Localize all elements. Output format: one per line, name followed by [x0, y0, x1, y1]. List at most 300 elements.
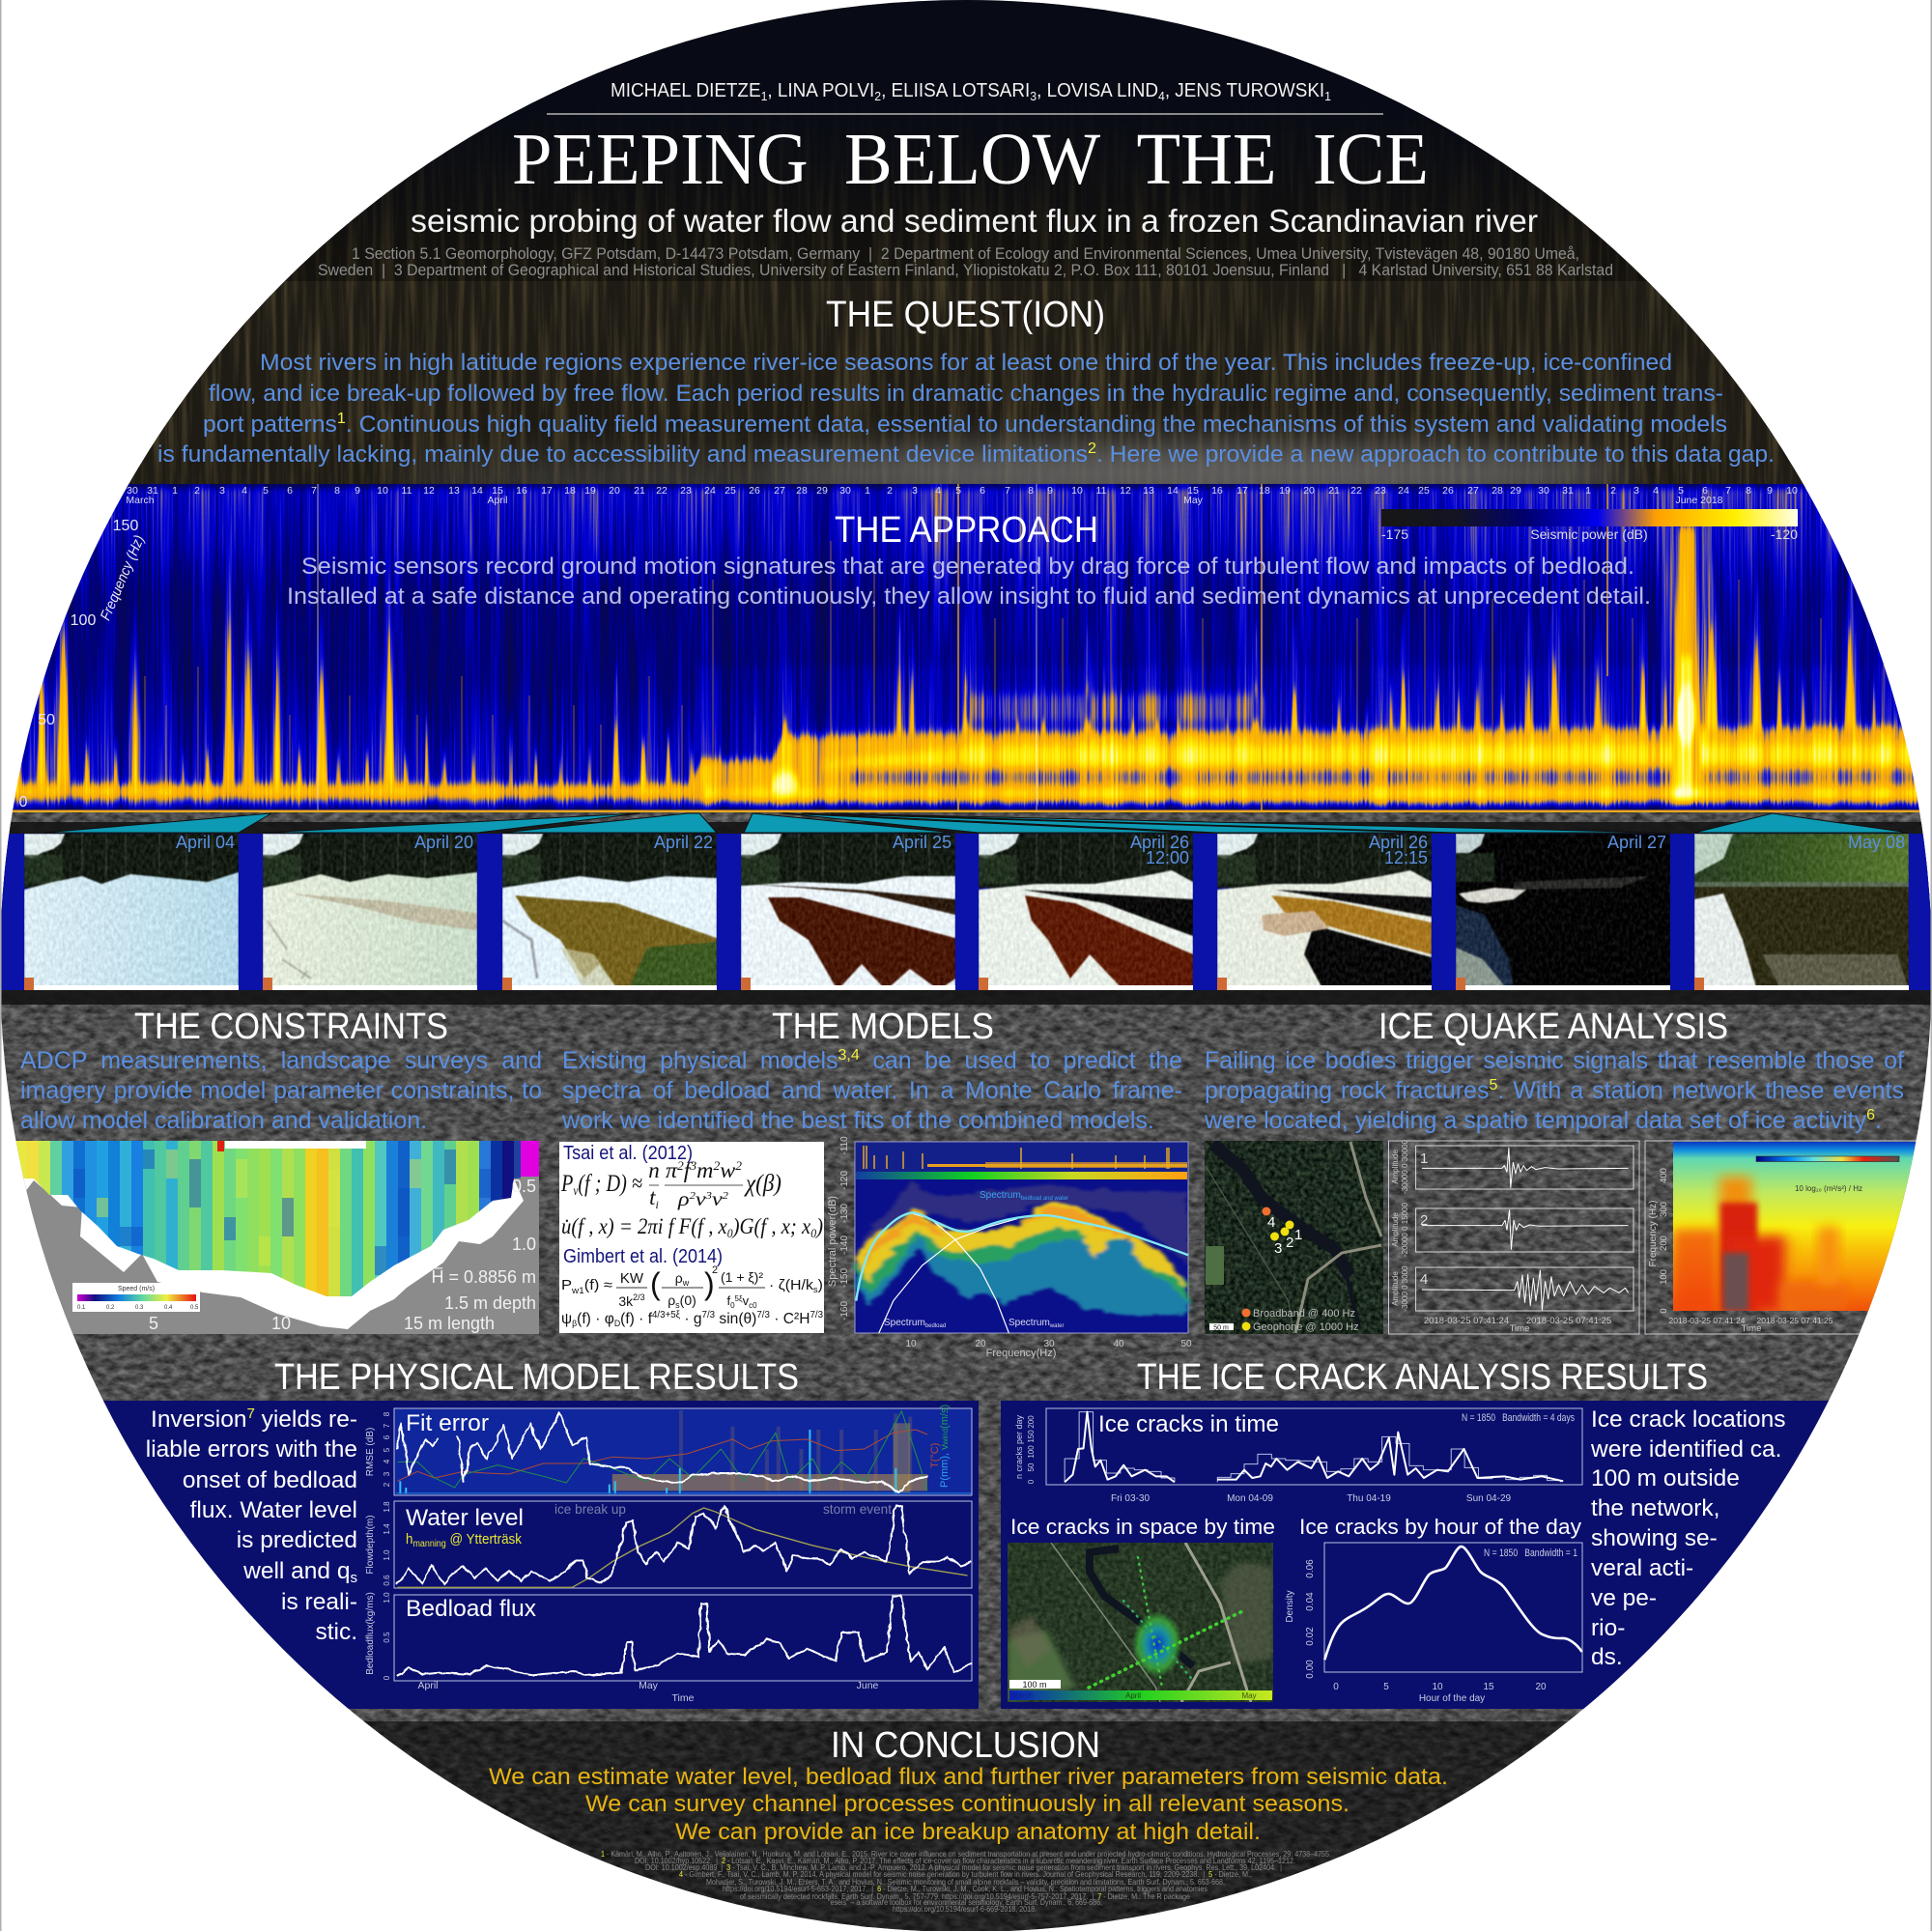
- authors: 1: [1324, 89, 1331, 103]
- text: conclusions: We can estimate water level, bedload flux and further river parameters from seismic data.: [489, 1764, 1448, 1790]
- timeline: day ticks: 30: [839, 485, 851, 497]
- panel: model equations: 2: [723, 1190, 729, 1202]
- text: conclusions: We can provide an ice breakup anatomy at high detail.: [675, 1819, 1261, 1845]
- chart: spectra Monte Carlo fits: 30: [1043, 1339, 1055, 1349]
- timeline: day ticks: 31: [147, 485, 158, 497]
- chart: water level: ice break up: [554, 1501, 626, 1517]
- chart: spectra Monte Carlo fits: -160: [839, 1301, 850, 1320]
- panel: model equations: c0: [749, 1301, 757, 1310]
- panel: model equations: β: [572, 1319, 577, 1328]
- timeline: day ticks: 16: [516, 485, 527, 497]
- panel: model equations: w: [720, 1158, 736, 1182]
- text: references: https://doi.org/10.5194/esurf-6-669-2018, 2018.: [893, 1904, 1037, 1914]
- chart: cracks by hour: 15: [1483, 1682, 1494, 1692]
- text: ice quake analysis: [1205, 1047, 1904, 1134]
- panel: model equations: 0: [810, 1226, 817, 1240]
- map: ice cracks in space: March: [1011, 1691, 1033, 1700]
- chart: spectra Monte Carlo fits: 20: [975, 1339, 986, 1349]
- panel: model equations: 0: [730, 1301, 735, 1310]
- timeline: day ticks: 16: [1211, 485, 1223, 497]
- timeline: day ticks: 4: [1653, 485, 1659, 497]
- text: ice crack locations: veral acti-: [1591, 1555, 1693, 1581]
- chart: spectra Monte Carlo fits: -150: [839, 1268, 850, 1288]
- photo date labels: April 25: [893, 833, 952, 852]
- panel: model equations: 0: [727, 1226, 733, 1240]
- chart: ice quake spectrogram: 200: [1659, 1235, 1669, 1251]
- chart: ice quake waveforms: Amplitude: [1391, 1212, 1400, 1247]
- photo date labels: April 26: [1130, 833, 1189, 852]
- chart: ADCP river cross section: 0.5: [512, 1177, 536, 1196]
- timeline: day ticks: 6: [287, 485, 293, 497]
- text: the question: flow, and ice break-up followed by free flow. Each period results in dramatic changes in the hydraulic regime and, consequently, sediment trans-: [209, 381, 1723, 407]
- panel: model equations: Gimbert et al. (2014): [563, 1246, 723, 1267]
- chart: ice quake waveforms: 1: [1420, 1150, 1428, 1167]
- panel: ice crack results: [1001, 1401, 1932, 1709]
- chart: spectra Monte Carlo fits: Spectral power(dB): [827, 1196, 838, 1287]
- timeline: day ticks: 22: [1350, 485, 1362, 497]
- dark band behind photo strip: [0, 822, 1932, 1005]
- map markers and legend: Geophone @ 1000 Hz: [1253, 1321, 1359, 1333]
- axis labels: physical model plots: Bedloadflux(kg/ms): [365, 1592, 376, 1675]
- timeline: day ticks: 29: [816, 485, 828, 497]
- axis labels: physical model plots: 8: [383, 1411, 391, 1416]
- timeline: day ticks: June 2018: [1675, 495, 1723, 506]
- panel: model equations: 3: [704, 1190, 713, 1202]
- panel: model equations: KW: [620, 1270, 644, 1287]
- panel: model equations: f: [726, 1293, 730, 1308]
- map markers and legend: 1: [1294, 1227, 1302, 1243]
- frequency axis labels: 100: [71, 612, 96, 629]
- chart: spectra Monte Carlo fits: -110: [839, 1136, 850, 1155]
- axis labels: physical model plots: 1.8: [383, 1501, 391, 1513]
- chart: ADCP river cross section: [15, 1141, 539, 1334]
- chart: water level: storm event: [823, 1501, 892, 1517]
- panel: model equations: · C²H: [770, 1311, 810, 1327]
- text: ice crack locations: were identified ca.: [1590, 1436, 1781, 1462]
- timeline: day ticks: 19: [584, 485, 596, 497]
- text: ice crack locations: [1590, 1406, 1786, 1670]
- timeline: day ticks: 19: [1279, 485, 1291, 497]
- chart: ice quake waveforms: [1389, 1139, 1639, 1334]
- text: references: Mohadjer, S., Turowski, J. M., Ehlers, T. A., and Hovius, N.: Seismic monitoring of small alpine rockfalls – validity, precision and limitations, Earth Surf. Dynam., 5, 653-668,: [706, 1877, 1225, 1887]
- map markers and legend: [1209, 1207, 1359, 1333]
- text: inversion: onset of bedload: [183, 1467, 357, 1493]
- panel: model equations: ρ: [678, 1187, 688, 1210]
- timeline: day ticks: 23: [680, 485, 692, 497]
- chart: bedload flux: Bedload flux: [406, 1596, 536, 1622]
- panel: model equations: 7/3: [756, 1310, 770, 1320]
- text: references: [601, 1849, 1331, 1914]
- text: the question: [157, 350, 1775, 468]
- chart: ice cracks in time: 200: [1027, 1415, 1036, 1429]
- text: inversion: s: [350, 1570, 357, 1586]
- text: ice crack locations: ds.: [1591, 1644, 1623, 1670]
- timeline: day ticks: 28: [1492, 485, 1503, 497]
- chart: bedload flux: [394, 1595, 972, 1681]
- timeline: day ticks: 15: [492, 485, 503, 497]
- timeline: day ticks: 21: [634, 485, 645, 497]
- chart: spectra Monte Carlo fits: bedload and water: [1021, 1196, 1068, 1202]
- timeline: day ticks: 5: [955, 485, 961, 497]
- axis labels: physical model plots: 2: [383, 1482, 391, 1487]
- chart: ice quake spectrogram: Time: [1742, 1323, 1761, 1334]
- chart: ADCP river cross section: 10: [271, 1314, 291, 1333]
- axis labels: physical model plots: 0.6: [383, 1575, 391, 1586]
- panel: model equations: ): [818, 1277, 823, 1293]
- chart: cracks by hour: Density: [1285, 1590, 1295, 1623]
- photo date labels: April 27: [1607, 833, 1666, 852]
- map markers and legend: 4: [1267, 1214, 1275, 1231]
- chart: ice quake spectrogram: 2018-03-25 07:41:24: [1669, 1316, 1746, 1325]
- panel: model equations: 3k: [618, 1293, 633, 1309]
- chart: ice cracks in time: 100: [1027, 1445, 1036, 1459]
- map: ice cracks in space: 100 m: [1022, 1680, 1047, 1690]
- text: the question: is fundamentally lacking, mainly due to accessibility and measurement device limitations: [157, 441, 1080, 468]
- axis labels: physical model plots: 0: [383, 1675, 391, 1680]
- authors: 4: [1158, 89, 1165, 103]
- background: dark rock texture bottom: [363, 1721, 1569, 1931]
- axis labels: physical model plots: 7: [383, 1423, 391, 1428]
- text: inversion: flux. Water level: [190, 1497, 357, 1523]
- panel: model equations: v: [573, 1184, 579, 1199]
- panel: model equations: n: [648, 1158, 660, 1182]
- chart: ice cracks in time: 0: [1027, 1479, 1036, 1484]
- frequency axis labels: [19, 518, 148, 810]
- timeline: day ticks: 17: [541, 485, 553, 497]
- chart: ice quake spectrogram: 10 log₁₀ (m²/s²) / Hz: [1795, 1184, 1862, 1193]
- text: inversion: is predicted: [237, 1527, 357, 1553]
- timeline: day ticks: 23: [1375, 485, 1386, 497]
- timeline: day ticks: 9: [355, 485, 360, 497]
- chart: water level: manning: [412, 1539, 446, 1549]
- authors: , JENS TUROWSKI: [1165, 80, 1324, 101]
- panel: model equations: t: [649, 1185, 656, 1209]
- text: inversion: 7: [246, 1406, 255, 1422]
- panel: model equations: (f) ≈: [584, 1277, 612, 1293]
- panel: model equations: v: [696, 1187, 706, 1210]
- background: dusk forest and grass photograph: [127, 0, 1805, 488]
- chart: spectra Monte Carlo fits: water: [1049, 1323, 1064, 1329]
- chart: spectra Monte Carlo fits: Frequency(Hz): [986, 1348, 1056, 1359]
- timeline: day ticks: 25: [1418, 485, 1430, 497]
- legend: speed: 0.5: [190, 1305, 199, 1311]
- panel: model equations: 3: [689, 1158, 697, 1173]
- text: the question: 2: [1088, 440, 1096, 457]
- timeline: day ticks: 18: [1259, 485, 1270, 497]
- axis labels: physical model plots: April: [417, 1680, 439, 1691]
- text: the models: spectra of bedload and water. In a Monte Carlo frame-: [562, 1077, 1182, 1104]
- panel: model equations: (f) · φ: [577, 1311, 614, 1327]
- chart: fit error: P(mm), vwind(m/s): [939, 1405, 951, 1488]
- text: the models: work we identified the best fits of the combined models.: [562, 1107, 1154, 1134]
- text: ice crack locations: Ice crack locations: [1591, 1406, 1786, 1433]
- chart: ADCP river cross section: 1.5 m depth: [444, 1293, 536, 1313]
- timeline: day ticks: 13: [1143, 485, 1154, 497]
- text: references: https://doi.org/10.5194/esurf-5-653-2017, 2017. | 6 - Dietze, M., Turowski, J. M., Cook, K. L., and Hovius, N.: Spatiotemporal patterns, triggers and anatomies: [723, 1884, 1208, 1893]
- chart: ice quake spectrogram: 400: [1659, 1168, 1669, 1183]
- mini spectrogram: [856, 1143, 1187, 1172]
- panel: model equations: D: [614, 1319, 621, 1328]
- heading: ice crack results: THE ICE CRACK ANALYSIS RESULTS: [1137, 1357, 1708, 1398]
- chart: cracks by hour: 20: [1535, 1682, 1547, 1692]
- timeline: day ticks: 9: [1767, 485, 1773, 497]
- map markers and legend: Broadband @ 400 Hz: [1253, 1308, 1355, 1320]
- teal connectors from spectrogram to photos: [43, 813, 1909, 833]
- chart: cracks by hour: 0.00: [1305, 1660, 1316, 1679]
- text: the approach: Seismic sensors record ground motion signatures that are generated by drag force of turbulent flow and impacts of bedload.: [301, 554, 1634, 580]
- panel: model equations: m: [696, 1158, 713, 1182]
- panel: model equations: ): [704, 1266, 715, 1301]
- chart: ADCP river cross section: 5: [149, 1314, 158, 1333]
- colour bar: seismic power: Seismic power (dB): [1530, 526, 1648, 542]
- chart: spectra Monte Carlo fits: Spectrum: [980, 1190, 1021, 1201]
- photo strip blue backing: [0, 834, 1932, 990]
- panel: model equations: w: [682, 1278, 690, 1288]
- timeline: day ticks: 28: [796, 485, 808, 497]
- timeline: day ticks: 22: [656, 485, 668, 497]
- chart: spectra Monte Carlo fits: [827, 1136, 1192, 1359]
- timeline: day ticks: 20: [609, 485, 620, 497]
- text: the approach: [287, 554, 1651, 610]
- affiliations: [318, 245, 1613, 279]
- timeline: day ticks: 24: [704, 485, 716, 497]
- panel: physical model results: [0, 1401, 979, 1709]
- timeline: day ticks: 10: [1071, 485, 1083, 497]
- chart: spectra Monte Carlo fits: 50: [1180, 1339, 1192, 1349]
- photo: April 26 12:00: [979, 834, 1193, 990]
- axis labels: physical model plots: 4: [383, 1459, 391, 1463]
- text: the question: port patterns: [203, 412, 336, 438]
- map: ice cracks in space: [1008, 1543, 1273, 1702]
- authors: MICHAEL DIETZE: [611, 80, 770, 101]
- text: the models: [562, 1047, 1182, 1134]
- axis labels: physical model plots: 1.0: [383, 1592, 391, 1604]
- photo date labels: May 08: [1848, 833, 1905, 852]
- chart: ADCP river cross section: H̅ = 0.8856 m: [431, 1267, 536, 1287]
- chart: ice quake waveforms: 2: [1420, 1212, 1428, 1229]
- authors: 3: [1030, 89, 1037, 103]
- timeline: day ticks: 15: [1187, 485, 1199, 497]
- text: ice crack locations: rio-: [1591, 1615, 1625, 1641]
- panel: model equations: 2/3: [633, 1292, 645, 1302]
- panel: model equations: Tsai et al. (2012): [563, 1143, 693, 1164]
- affiliations: Sweden | 3 Department of Geographical and Historical Studies, University of Eastern Finland, Yliopistokatu 2, P.O. Box 111, 80101 Joensuu, Finland | 4 Karlstad University, 651 88 Karlstad: [318, 262, 1613, 279]
- timeline: day ticks: 12: [423, 485, 435, 497]
- text: the constraints: allow model calibration and validation.: [20, 1107, 427, 1134]
- panel: model equations: 2: [690, 1190, 696, 1202]
- timeline: day ticks: 8: [1746, 485, 1751, 497]
- text: the question: Most rivers in high latitude regions experience river-ice seasons for at least one third of the year. This includes freeze-up, ice-confined: [260, 350, 1672, 376]
- chart: water level: @ Ytterträsk: [446, 1531, 522, 1548]
- heading: physical model results: THE PHYSICAL MODEL RESULTS: [274, 1357, 799, 1398]
- timeline: day ticks: March: [126, 495, 155, 506]
- legend: speed: 0.4: [164, 1305, 173, 1311]
- panel: model equations: 2: [712, 1264, 718, 1276]
- title: PEEPING BELOW THE ICE: [512, 119, 1429, 200]
- panel: model equations: P: [561, 1171, 576, 1197]
- timeline: day ticks: 4: [935, 485, 941, 497]
- text: the approach: Installed at a safe distance and operating continuously, they allow insight to fluid and sediment dynamics at unprecedent detail.: [287, 583, 1651, 610]
- chart: ice cracks in time: Ice cracks in time: [1098, 1411, 1279, 1437]
- photo date labels: April 20: [414, 833, 473, 852]
- chart: cracks by hour: 10: [1432, 1682, 1443, 1692]
- text: ice quake analysis: Failing ice bodies trigger seismic signals that resemble those of: [1205, 1047, 1904, 1074]
- text: ice crack locations: showing se-: [1591, 1525, 1718, 1551]
- map: ice cracks in space: April: [1125, 1691, 1141, 1700]
- map markers and legend: 3: [1274, 1240, 1282, 1257]
- frequency axis labels: 150: [113, 518, 138, 534]
- chart: ice quake spectrogram: 300: [1659, 1202, 1669, 1217]
- panel: model equations: [559, 1142, 824, 1333]
- panel: model equations: χ(β): [744, 1171, 781, 1197]
- heading: the constraints: THE CONSTRAINTS: [134, 1007, 448, 1047]
- chart: ice cracks in time: [1014, 1408, 1582, 1504]
- text: conclusions: We can survey channel processes continuously in all relevant seasons.: [585, 1791, 1350, 1817]
- chart: ice quake waveforms: -20000 0 15000: [1401, 1202, 1409, 1257]
- legend: speed: Speed (m/s): [118, 1286, 155, 1292]
- chart: ice cracks in time: n cracks per day: [1014, 1414, 1024, 1479]
- timeline: day ticks: May: [1183, 495, 1204, 506]
- heading: the models: THE MODELS: [772, 1007, 994, 1047]
- timeline: day ticks: 4: [242, 485, 247, 497]
- frequency axis labels: Frequency (Hz): [98, 533, 148, 623]
- photo date labels: 12:15: [1384, 848, 1428, 867]
- chart: ice quake waveforms: -30000 0 30000: [1401, 1139, 1409, 1194]
- panel: model equations: 7/3: [810, 1310, 823, 1320]
- chart: ice quake waveforms: 4: [1420, 1271, 1428, 1288]
- panel: model equations: )G(f , x; x: [731, 1214, 811, 1238]
- axis labels: physical model plots: [365, 1411, 879, 1704]
- legend: speed: 0.3: [135, 1305, 144, 1311]
- timeline: day ticks: 27: [1467, 485, 1479, 497]
- text: inversion: well and q: [243, 1558, 350, 1584]
- chart: ice quake waveforms: 2018-03-25 07:41:24: [1424, 1316, 1509, 1326]
- timeline: day ticks: 5: [1678, 485, 1684, 497]
- text: ice crack locations: 100 m outside: [1591, 1465, 1740, 1491]
- chart: fit error: Fit error: [406, 1410, 489, 1436]
- heading: in conclusion: IN CONCLUSION: [831, 1725, 1100, 1766]
- photo: April 04: [24, 834, 239, 990]
- timeline: day ticks: 24: [1398, 485, 1409, 497]
- timeline: day ticks: 30: [1538, 485, 1549, 497]
- map markers and legend: 2: [1286, 1235, 1293, 1251]
- chart: ice quake waveforms: 2018-03-25 07:41:25: [1526, 1316, 1611, 1326]
- chart: ADCP river cross section: 1.0: [512, 1235, 536, 1254]
- chart: cracks by hour: 5: [1383, 1682, 1389, 1692]
- chart: ice cracks in time: Thu 04-19: [1347, 1493, 1391, 1504]
- chart: water level: h: [406, 1531, 413, 1548]
- chart: cracks by hour: N = 1850 Bandwidth = 1: [1484, 1548, 1577, 1559]
- timeline: day ticks: 29: [1510, 485, 1521, 497]
- text: the question: 1: [337, 411, 346, 427]
- text: inversion: Inversion: [151, 1406, 246, 1433]
- text: ice crack locations: the network,: [1591, 1495, 1719, 1521]
- timeline: day ticks: 11: [1096, 485, 1107, 497]
- map: station network: [1205, 1141, 1383, 1334]
- photo date labels: April 22: [654, 833, 713, 852]
- heading: ice quake analysis: ICE QUAKE ANALYSIS: [1378, 1007, 1728, 1047]
- axis labels: physical model plots: 1.4: [383, 1523, 391, 1535]
- chart: ice cracks in time: 50: [1027, 1462, 1036, 1471]
- text: references: 1 - Kämäri, M., Alho, P., Aaltonen, J., Veijalainen, N., Huokuna, M. and Lotsari, E., 2015. River ice cover influence on sediment transportation at present and under projected hydro-climatic conditions. Hydrological Processes, 29: 4738–4755.: [601, 1849, 1331, 1859]
- panel: model equations: ): [814, 1214, 823, 1238]
- timeline: day ticks: 2: [1610, 485, 1616, 497]
- panel: model equations: ρ: [668, 1292, 675, 1308]
- photo date labels: [176, 835, 1905, 864]
- authors: 1: [761, 89, 767, 103]
- colour bar: seismic power: -175: [1381, 526, 1408, 542]
- chart: cracks by hour: 0.04: [1305, 1592, 1316, 1611]
- legend: speed: [72, 1283, 200, 1312]
- chart: cracks by hour: [1285, 1543, 1582, 1704]
- text: references: of seismically detected rockfalls, Earth Surf. Dynam., 5, 757-779, https://doi.org/10.5194/esurf-5-757-2017, 2017. | 7 - Dietze, M.: The R package: [740, 1891, 1190, 1901]
- chart: fit error: T(°C): [929, 1443, 941, 1468]
- chart: ice cracks in time: Mon 04-09: [1227, 1493, 1273, 1504]
- text: references: 4 - Gimbert, F., Tsai, V. C., Lamb, M. P. 2014. A physical model for seismic noise generation by turbulent flow in rivers. Journal of Geophysical Research, 119, 2209-2238. | 5 - Dietze, M.,: [679, 1869, 1252, 1879]
- chart: spectra Monte Carlo fits: Spectrum: [1009, 1318, 1050, 1328]
- chart: ice cracks in time: Fri 03-30: [1111, 1493, 1150, 1504]
- authors: 2: [874, 89, 881, 103]
- photo: May 08: [1694, 834, 1909, 990]
- panel: model equations: s: [813, 1285, 818, 1294]
- chart: cracks by hour: Hour of the day: [1419, 1693, 1485, 1704]
- timeline: day ticks: 1: [865, 485, 870, 497]
- timeline: day ticks: 18: [564, 485, 576, 497]
- axis labels: physical model plots: Flowdepth(m): [365, 1515, 376, 1575]
- axis labels: physical model plots: May: [639, 1680, 659, 1691]
- panel: model equations: f: [684, 1158, 694, 1182]
- timeline: day ticks: 20: [1303, 485, 1315, 497]
- timeline: day ticks: 11: [402, 485, 412, 497]
- chart: cracks by hour: 0: [1333, 1682, 1339, 1692]
- text: ice crack locations: ve pe-: [1591, 1585, 1657, 1611]
- timeline: day ticks: 1: [1585, 485, 1591, 497]
- panel: model equations: 5ξ: [735, 1294, 743, 1303]
- timeline: day ticks: 26: [749, 485, 760, 497]
- frequency axis labels: 50: [38, 712, 55, 728]
- panel: model equations: P: [561, 1277, 571, 1293]
- authors: , ELIISA LOTSARI: [881, 80, 1030, 101]
- timeline: day ticks: 6: [980, 485, 985, 497]
- timeline: day ticks: 21: [1328, 485, 1340, 497]
- timeline: day ticks: 1: [172, 485, 178, 497]
- chart: ice quake waveforms: Time: [1510, 1323, 1529, 1334]
- text: the constraints: ADCP measurements, landscape surveys and: [20, 1047, 542, 1074]
- background: grey rock texture: [0, 811, 1932, 1721]
- panel: model equations: (1 + ξ)²: [721, 1269, 763, 1285]
- text: inversion: stic.: [315, 1619, 357, 1645]
- timeline: day ticks: [127, 487, 1797, 505]
- chart: spectra Monte Carlo fits: -120: [839, 1171, 850, 1190]
- text: ice quake analysis: were located, yielding a spatio temporal data set of ice activity6.: [1205, 1107, 1882, 1134]
- panel: model equations: (0): [680, 1292, 696, 1308]
- timeline: day ticks: 8: [334, 485, 340, 497]
- panel: model equations: i: [656, 1198, 659, 1211]
- axis labels: physical model plots: 3: [383, 1471, 391, 1476]
- chart: spectra Monte Carlo fits: -130: [839, 1204, 850, 1223]
- text: inversion: is reali-: [281, 1589, 357, 1615]
- timeline: day ticks: 10: [377, 485, 388, 497]
- chart: ice cracks in time: Sun 04-29: [1466, 1493, 1512, 1504]
- timeline: day ticks: 9: [1047, 485, 1053, 497]
- timeline: day ticks: 5: [263, 485, 269, 497]
- frequency axis labels: 0: [19, 794, 28, 810]
- timeline: day ticks: 7: [1725, 485, 1731, 497]
- legend: speed: 0.1: [77, 1305, 86, 1311]
- timeline: day ticks: 3: [1634, 485, 1639, 497]
- text: conclusions: [489, 1764, 1448, 1845]
- heading: the approach: THE APPROACH: [835, 510, 1098, 551]
